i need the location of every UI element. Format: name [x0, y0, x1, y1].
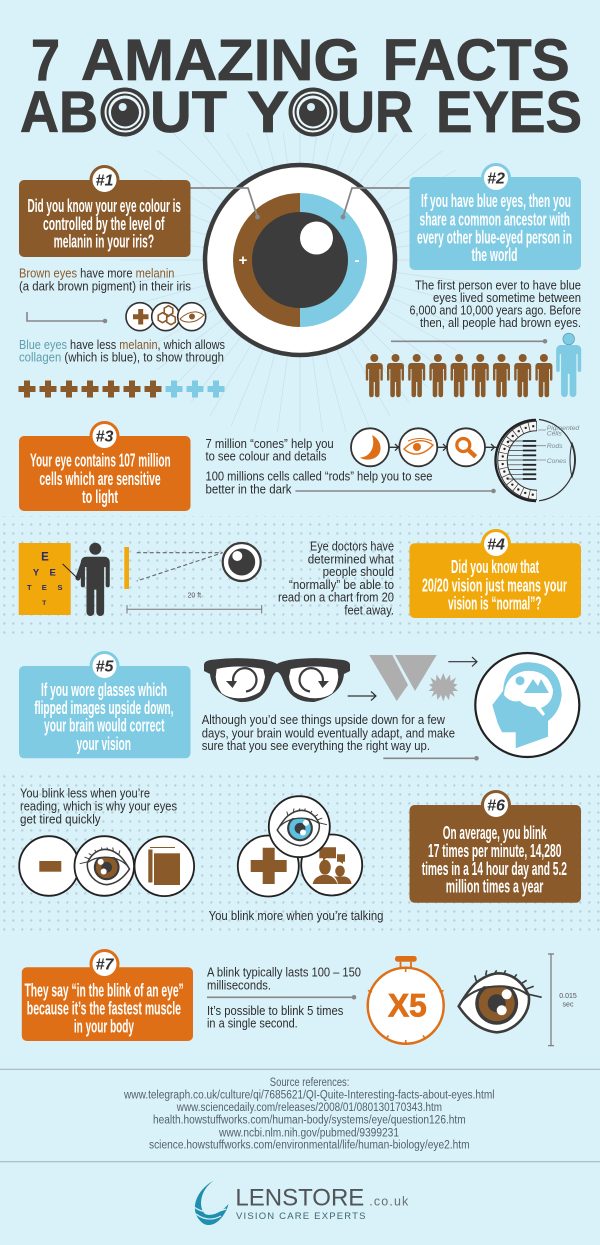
arrow: [348, 692, 376, 700]
scale: blink height: sec: [563, 1002, 574, 1008]
logo wordmark: .co.uk: [369, 1195, 409, 1209]
text: rods: [206, 469, 432, 496]
fact 3 heading: cells which are sensitive: [39, 469, 161, 489]
plus row: [18, 380, 224, 398]
scale: blink height: 0.015: [559, 993, 577, 1000]
title: Y: [247, 80, 289, 145]
text: rods: 100 millions cells called “rods” help you to see: [206, 469, 432, 484]
fact 5 heading: [34, 680, 173, 754]
text: rods: better in the dark: [206, 481, 292, 496]
fact 7 heading: because it’s the fastest muscle: [27, 999, 181, 1019]
source references: health.howstuffworks.com/human-body/systems/eye/question126.htm: [153, 1115, 466, 1127]
big eye diagram: [205, 165, 395, 355]
logo wordmark: [235, 1185, 409, 1222]
connector: fact 2 to iris: [342, 188, 410, 218]
icon: eye chart: T: [42, 600, 46, 607]
title: UR: [337, 80, 413, 145]
logo swirl: [194, 1181, 228, 1225]
scale: 20 ft: [127, 592, 262, 614]
badge 2: [482, 164, 510, 192]
logo wordmark: VISION CARE EXPERTS: [236, 1211, 366, 1222]
source references: Source references:: [270, 1077, 349, 1089]
badge 5: #5: [96, 658, 114, 676]
title: AB: [20, 80, 98, 145]
arrow: [448, 657, 477, 666]
big eye diagram: -: [354, 252, 360, 269]
badge 3: #3: [96, 428, 114, 446]
badge 7: #7: [96, 956, 114, 974]
scale: blink height: [548, 954, 577, 1046]
text: blue eyes: [19, 337, 225, 365]
fact 4 heading: [422, 557, 567, 613]
fact 7 heading: [24, 981, 184, 1037]
icon: inverted shapes: [369, 655, 458, 702]
fact 5 heading: flipped images upside down,: [34, 698, 173, 718]
badge 4: [482, 530, 510, 558]
text: eye doctors: [278, 539, 394, 618]
text: eye doctors: feet away.: [344, 603, 394, 618]
text: blink five times: It’s possible to blink 5 times: [207, 1003, 344, 1018]
source references: science.howstuffworks.com/environmental/life/human-biology/eye2.htm: [149, 1140, 470, 1152]
fact 2 heading: [417, 191, 572, 265]
text: blink more: You blink more when you’re talking: [209, 908, 384, 923]
panel: fact 6: [410, 792, 581, 903]
blue person: [556, 333, 581, 397]
text: eye doctors: people should: [323, 564, 394, 579]
icon: head with brain: [475, 653, 579, 757]
text: blink duration: A blink typically lasts 100 – 150: [207, 965, 361, 980]
panel: fact 7: [22, 950, 193, 1041]
dotted band: fact 4: [0, 516, 600, 634]
retina diagram: Rods: [547, 443, 563, 450]
text: blink duration: [207, 965, 361, 992]
connector: adapt: [383, 757, 478, 760]
text: adapt: [202, 712, 455, 753]
badge 2: #2: [487, 170, 505, 188]
text: blink duration: milliseconds.: [207, 977, 271, 992]
icon: stopwatch: [368, 956, 444, 1044]
icon: eye chart: E: [41, 552, 49, 564]
text: blue eyes: Blue eyes have less melanin, which allows: [19, 337, 225, 352]
fact 2 heading: the world: [472, 245, 518, 265]
icon: flipped glasses: [204, 658, 350, 702]
panel: fact 1: [19, 166, 190, 257]
icon: eye chart: [19, 543, 71, 615]
scale: 20 ft: 20 ft: [187, 592, 201, 600]
text: blink less: You blink less when you’re: [20, 785, 150, 800]
text: blink less: reading, which is why your eyes: [20, 799, 177, 814]
fact 6 heading: [422, 823, 567, 897]
badge 1: [91, 166, 118, 194]
text: cones: 7 million “cones” help you: [206, 436, 334, 451]
text: blink less: [20, 785, 177, 826]
icon: eye chart: E: [50, 568, 56, 578]
logo: Lenstore: [194, 1181, 409, 1225]
badge 1: #1: [96, 172, 114, 190]
badge 3: [91, 422, 118, 450]
fact 3 heading: Your eye contains 107 million: [30, 451, 171, 471]
badge 4: #4: [487, 536, 505, 554]
icon: eye chart: T: [27, 583, 32, 592]
connector: fact 1 to iris: [190, 188, 259, 218]
source references: www.sciencedaily.com/releases/2008/01/080130170343.htm: [176, 1102, 442, 1114]
source references: [123, 1077, 494, 1152]
connector: rods: [295, 490, 495, 492]
fact 3 heading: to light: [82, 487, 118, 507]
badge 5: [91, 652, 118, 680]
connector: people: [391, 340, 546, 343]
retina diagram: Pigmented: [547, 425, 579, 432]
badge 6: #6: [487, 798, 505, 814]
text: blink less: get tired quickly: [20, 811, 101, 826]
fact 3 heading: [30, 451, 171, 507]
icon: eye chart: E: [42, 583, 47, 592]
panel: fact 4: [410, 530, 581, 618]
panel: fact 2: [410, 164, 581, 270]
title: O: [106, 80, 144, 145]
dotted band: fact 6: [0, 775, 600, 937]
icon: vision lines: [124, 543, 261, 589]
retina diagram: Cones: [547, 458, 567, 465]
text: first blue eyes: [410, 278, 581, 330]
panel: fact 3: [19, 422, 190, 511]
fact 5 heading: your brain would correct: [44, 716, 164, 736]
title: [20, 28, 582, 145]
text: adapt: days, your brain would eventually adapt, and make: [202, 725, 455, 740]
panel: fact 5: [19, 652, 190, 758]
people row: [366, 354, 552, 397]
fact 7 heading: They say “in the blink of an eye”: [24, 981, 184, 1001]
logo wordmark: LENSTORE: [235, 1185, 364, 1212]
icons: light path: [351, 428, 498, 466]
text: cones: to see colour and details: [206, 449, 327, 464]
text: cones: [206, 436, 334, 464]
title: AMAZING: [81, 28, 360, 93]
icons: talking trio: [238, 796, 362, 896]
text: eye doctors: Eye doctors have: [310, 539, 394, 554]
fact 5 heading: your vision: [76, 734, 131, 754]
fact 7 heading: in your body: [74, 1017, 134, 1037]
icon: person pointing: [63, 543, 110, 616]
connector: brown eyes: [27, 312, 106, 322]
text: brown eyes: (a dark brown pigment) in their iris: [19, 279, 191, 294]
text: first blue eyes: eyes lived sometime between: [433, 290, 581, 305]
retina diagram: Cells: [547, 430, 562, 438]
text: brown eyes: Brown eyes have more melanin: [19, 266, 174, 281]
text: eye doctors: “normally” be able to: [289, 577, 394, 592]
fact 5 heading: If you wore glasses which: [41, 680, 167, 700]
text: blue eyes: collagen (which is blue), to show through: [19, 350, 224, 365]
fact 1 heading: [28, 196, 181, 252]
icon: brown eye: [459, 970, 542, 1032]
text: eye doctors: read on a chart from 20: [278, 590, 394, 605]
badge 6: [482, 792, 510, 818]
source references: www.telegraph.co.uk/culture/qi/7685621/QI-Quite-Interesting-facts-about-eyes.html: [123, 1089, 494, 1101]
icon: eye chart: S: [57, 583, 63, 592]
big eye diagram: +: [239, 252, 248, 269]
icons: melanin trio: [126, 303, 206, 331]
source references: www.ncbi.nlm.nih.gov/pubmed/9399231: [218, 1127, 399, 1139]
fact 1 heading: Did you know your eye colour is: [28, 196, 181, 216]
title: 7: [31, 28, 60, 93]
title: FACTS: [383, 28, 570, 93]
title: UT: [150, 80, 227, 145]
retina diagram: [496, 420, 579, 501]
text: blink five times: [207, 1003, 344, 1031]
icon: stopwatch: X5: [388, 988, 427, 1024]
fact 1 heading: melanin in your iris?: [54, 232, 154, 252]
fact 1 heading: controlled by the level of: [43, 214, 165, 234]
icons: reading trio: [19, 836, 194, 896]
badge 7: [91, 950, 118, 978]
title: O: [294, 80, 332, 145]
title: EYES: [436, 80, 582, 145]
text: adapt: sure that you see everything the right way up.: [202, 738, 430, 753]
text: brown eyes: [19, 266, 191, 294]
divider line: blink: [207, 996, 356, 999]
text: eye doctors: determined what: [308, 551, 394, 566]
text: adapt: Although you’d see things upside down for a few: [202, 712, 446, 727]
icon: eye chart: Y: [33, 568, 40, 578]
text: blink five times: in a single second.: [207, 1016, 298, 1031]
